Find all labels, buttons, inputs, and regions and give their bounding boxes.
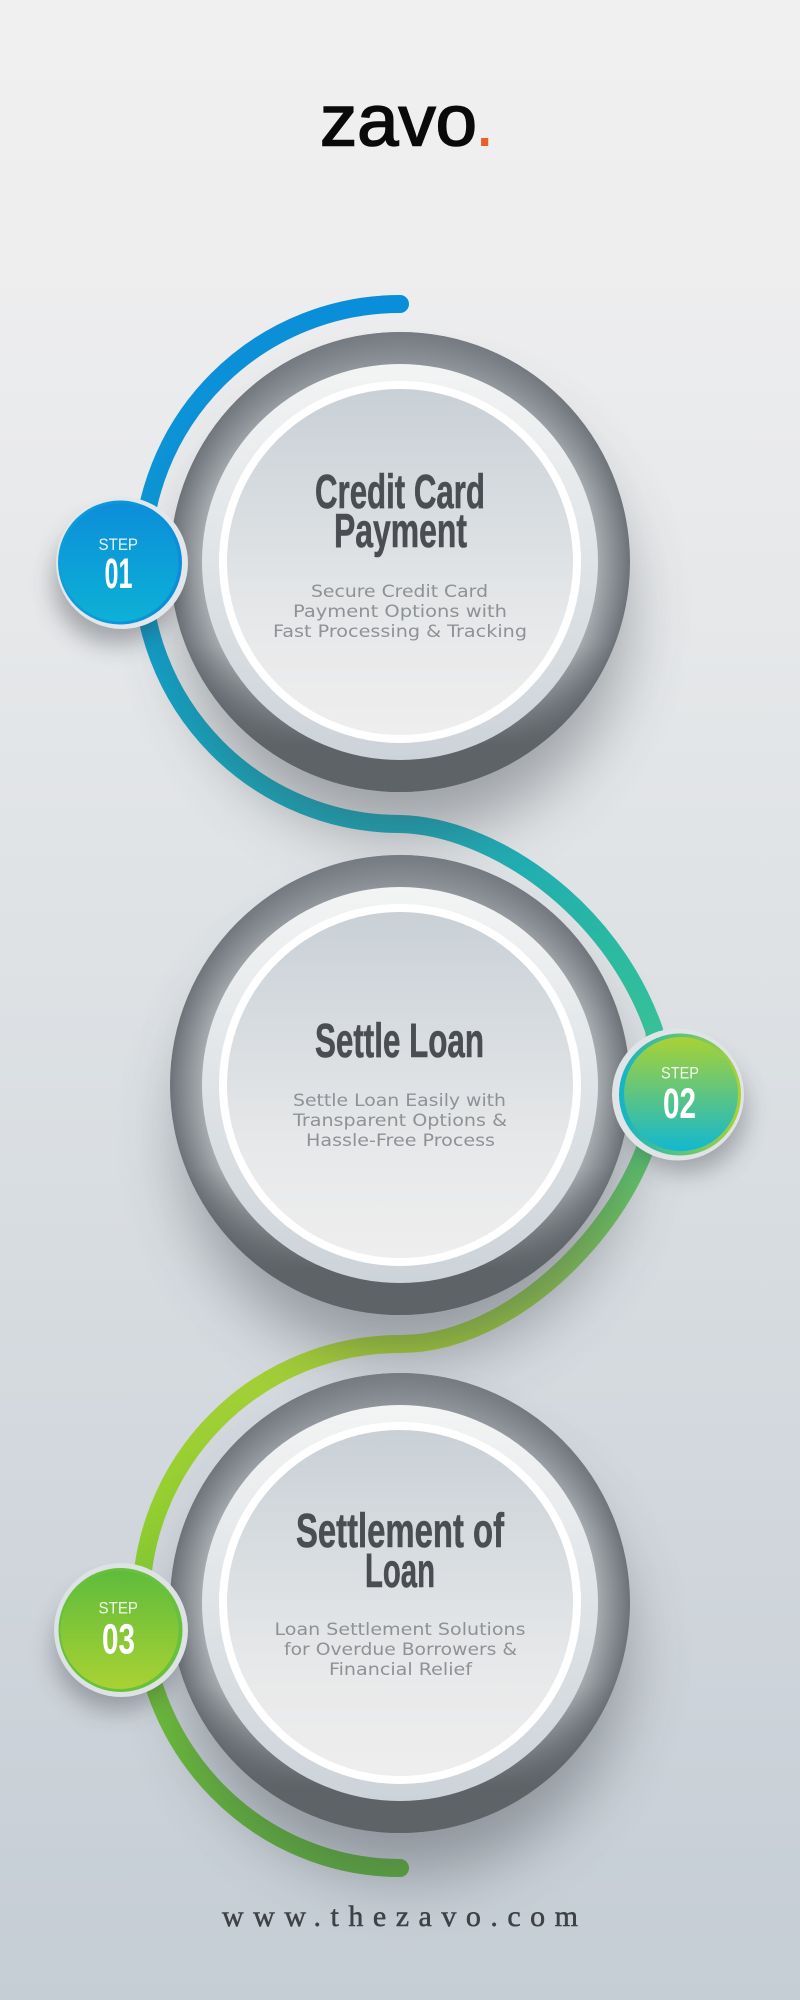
badge: step 02: STEP	[661, 1064, 699, 1082]
panel: step 3 circle	[170, 1373, 630, 1875]
text: step 3 description: for Overdue Borrowers &	[284, 1640, 517, 1660]
text: step 1 description: Payment Options with	[293, 602, 507, 622]
text: step 1 description: Secure Credit Card	[311, 582, 488, 602]
text: step 2 description	[292, 1091, 507, 1151]
text: step 1 description: Fast Processing & Tracking	[273, 622, 527, 642]
badge: step 01	[54, 497, 188, 644]
heading: Settle Loan: Settle Loan	[315, 1015, 484, 1068]
text: step 3 description: Financial Relief	[329, 1660, 473, 1680]
badge: step 03	[54, 1563, 188, 1711]
heading: Settlement of Loan: Settlement of	[296, 1505, 505, 1558]
text: step 1 description	[273, 582, 527, 642]
heading: Credit Card Payment: Payment	[334, 505, 467, 558]
badge: step 03: 03	[102, 1616, 135, 1664]
footer: website: www.thezavo.com	[222, 1900, 578, 1933]
text: step 3 description: Loan Settlement Solutions	[274, 1620, 526, 1640]
heading: Credit Card Payment: Credit Card	[315, 466, 485, 519]
badge: step 01: 01	[104, 550, 132, 598]
logo: zavo: zavo	[320, 82, 477, 162]
text: step 2 description: Settle Loan Easily with	[293, 1091, 506, 1111]
connecting path: blue to teal to green	[141, 304, 658, 1868]
badge: step 03: STEP	[98, 1600, 138, 1618]
heading: Credit Card Payment	[315, 466, 485, 558]
panel: step 1 circle	[170, 332, 630, 834]
logo: zavo: .	[474, 78, 495, 162]
text: step 2 description: Hassle-Free Process	[306, 1131, 495, 1151]
heading: Settlement of Loan	[296, 1505, 505, 1598]
text: step 2 description: Transparent Options &	[292, 1111, 507, 1131]
heading: Settlement of Loan: Loan	[365, 1545, 435, 1598]
text: step 3 description	[274, 1620, 526, 1680]
badge: step 02: 02	[663, 1080, 696, 1128]
panel: step 2 circle	[170, 855, 630, 1357]
badge: step 01: STEP	[98, 536, 138, 554]
badge: step 02	[612, 1028, 746, 1172]
